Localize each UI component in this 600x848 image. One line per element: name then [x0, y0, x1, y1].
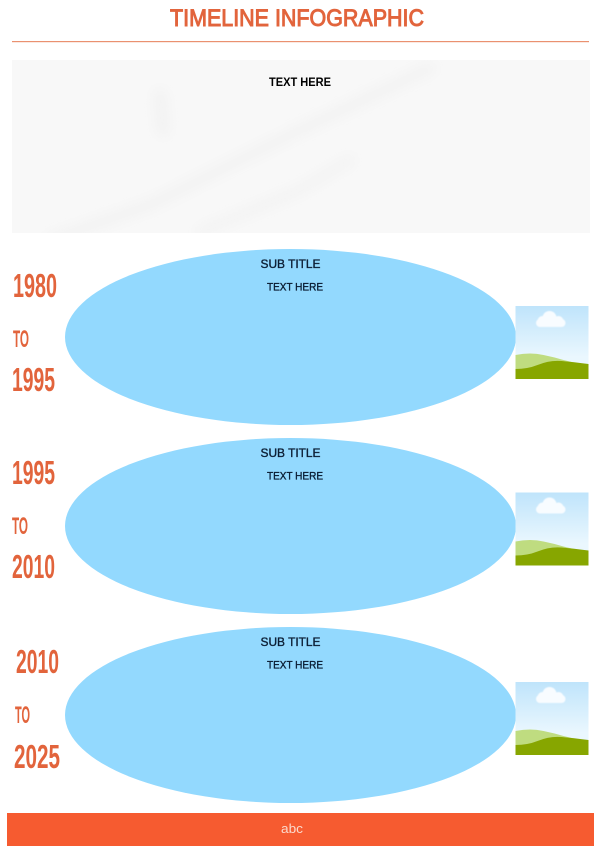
timeline row 1: [12, 249, 588, 425]
years: 1980 to 1995: [12, 267, 57, 398]
years: 1995 to 2010: [12, 454, 55, 585]
years: 2010 to 2025: TO: [15, 702, 30, 729]
years: 2010 to 2025: [14, 643, 60, 775]
image placeholder: [516, 306, 588, 379]
panel: intro text: [46, 60, 438, 233]
sub title: SUB TITLE: [260, 257, 320, 271]
years: 1995 to 2010: 2010: [12, 548, 55, 585]
ellipse: [65, 249, 516, 425]
years: 1995 to 2010: 1995: [12, 454, 55, 491]
years: 1980 to 1995: 1995: [12, 361, 55, 398]
sub title: SUB TITLE: [260, 446, 320, 460]
footer text: abc: [281, 822, 303, 836]
years: 2010 to 2025: 2010: [16, 643, 59, 680]
timeline row 2: [12, 438, 588, 614]
footer bar: [7, 813, 594, 846]
years: 2010 to 2025: 2025: [14, 738, 60, 775]
panel text: TEXT HERE: [269, 75, 331, 89]
title: TIMELINE INFOGRAPHIC: [170, 5, 424, 32]
timeline row 3: [14, 627, 588, 803]
body text: TEXT HERE: [267, 470, 323, 482]
years: 1980 to 1995: 1980: [13, 267, 57, 304]
years: 1980 to 1995: TO: [13, 326, 29, 353]
years: 1995 to 2010: TO: [12, 513, 28, 540]
image placeholder: [516, 492, 588, 566]
body text: TEXT HERE: [267, 282, 323, 294]
ellipse: [65, 438, 516, 614]
image placeholder: [516, 682, 588, 755]
ellipse: [65, 627, 516, 803]
sub title: SUB TITLE: [260, 635, 320, 649]
body text: TEXT HERE: [267, 660, 323, 672]
